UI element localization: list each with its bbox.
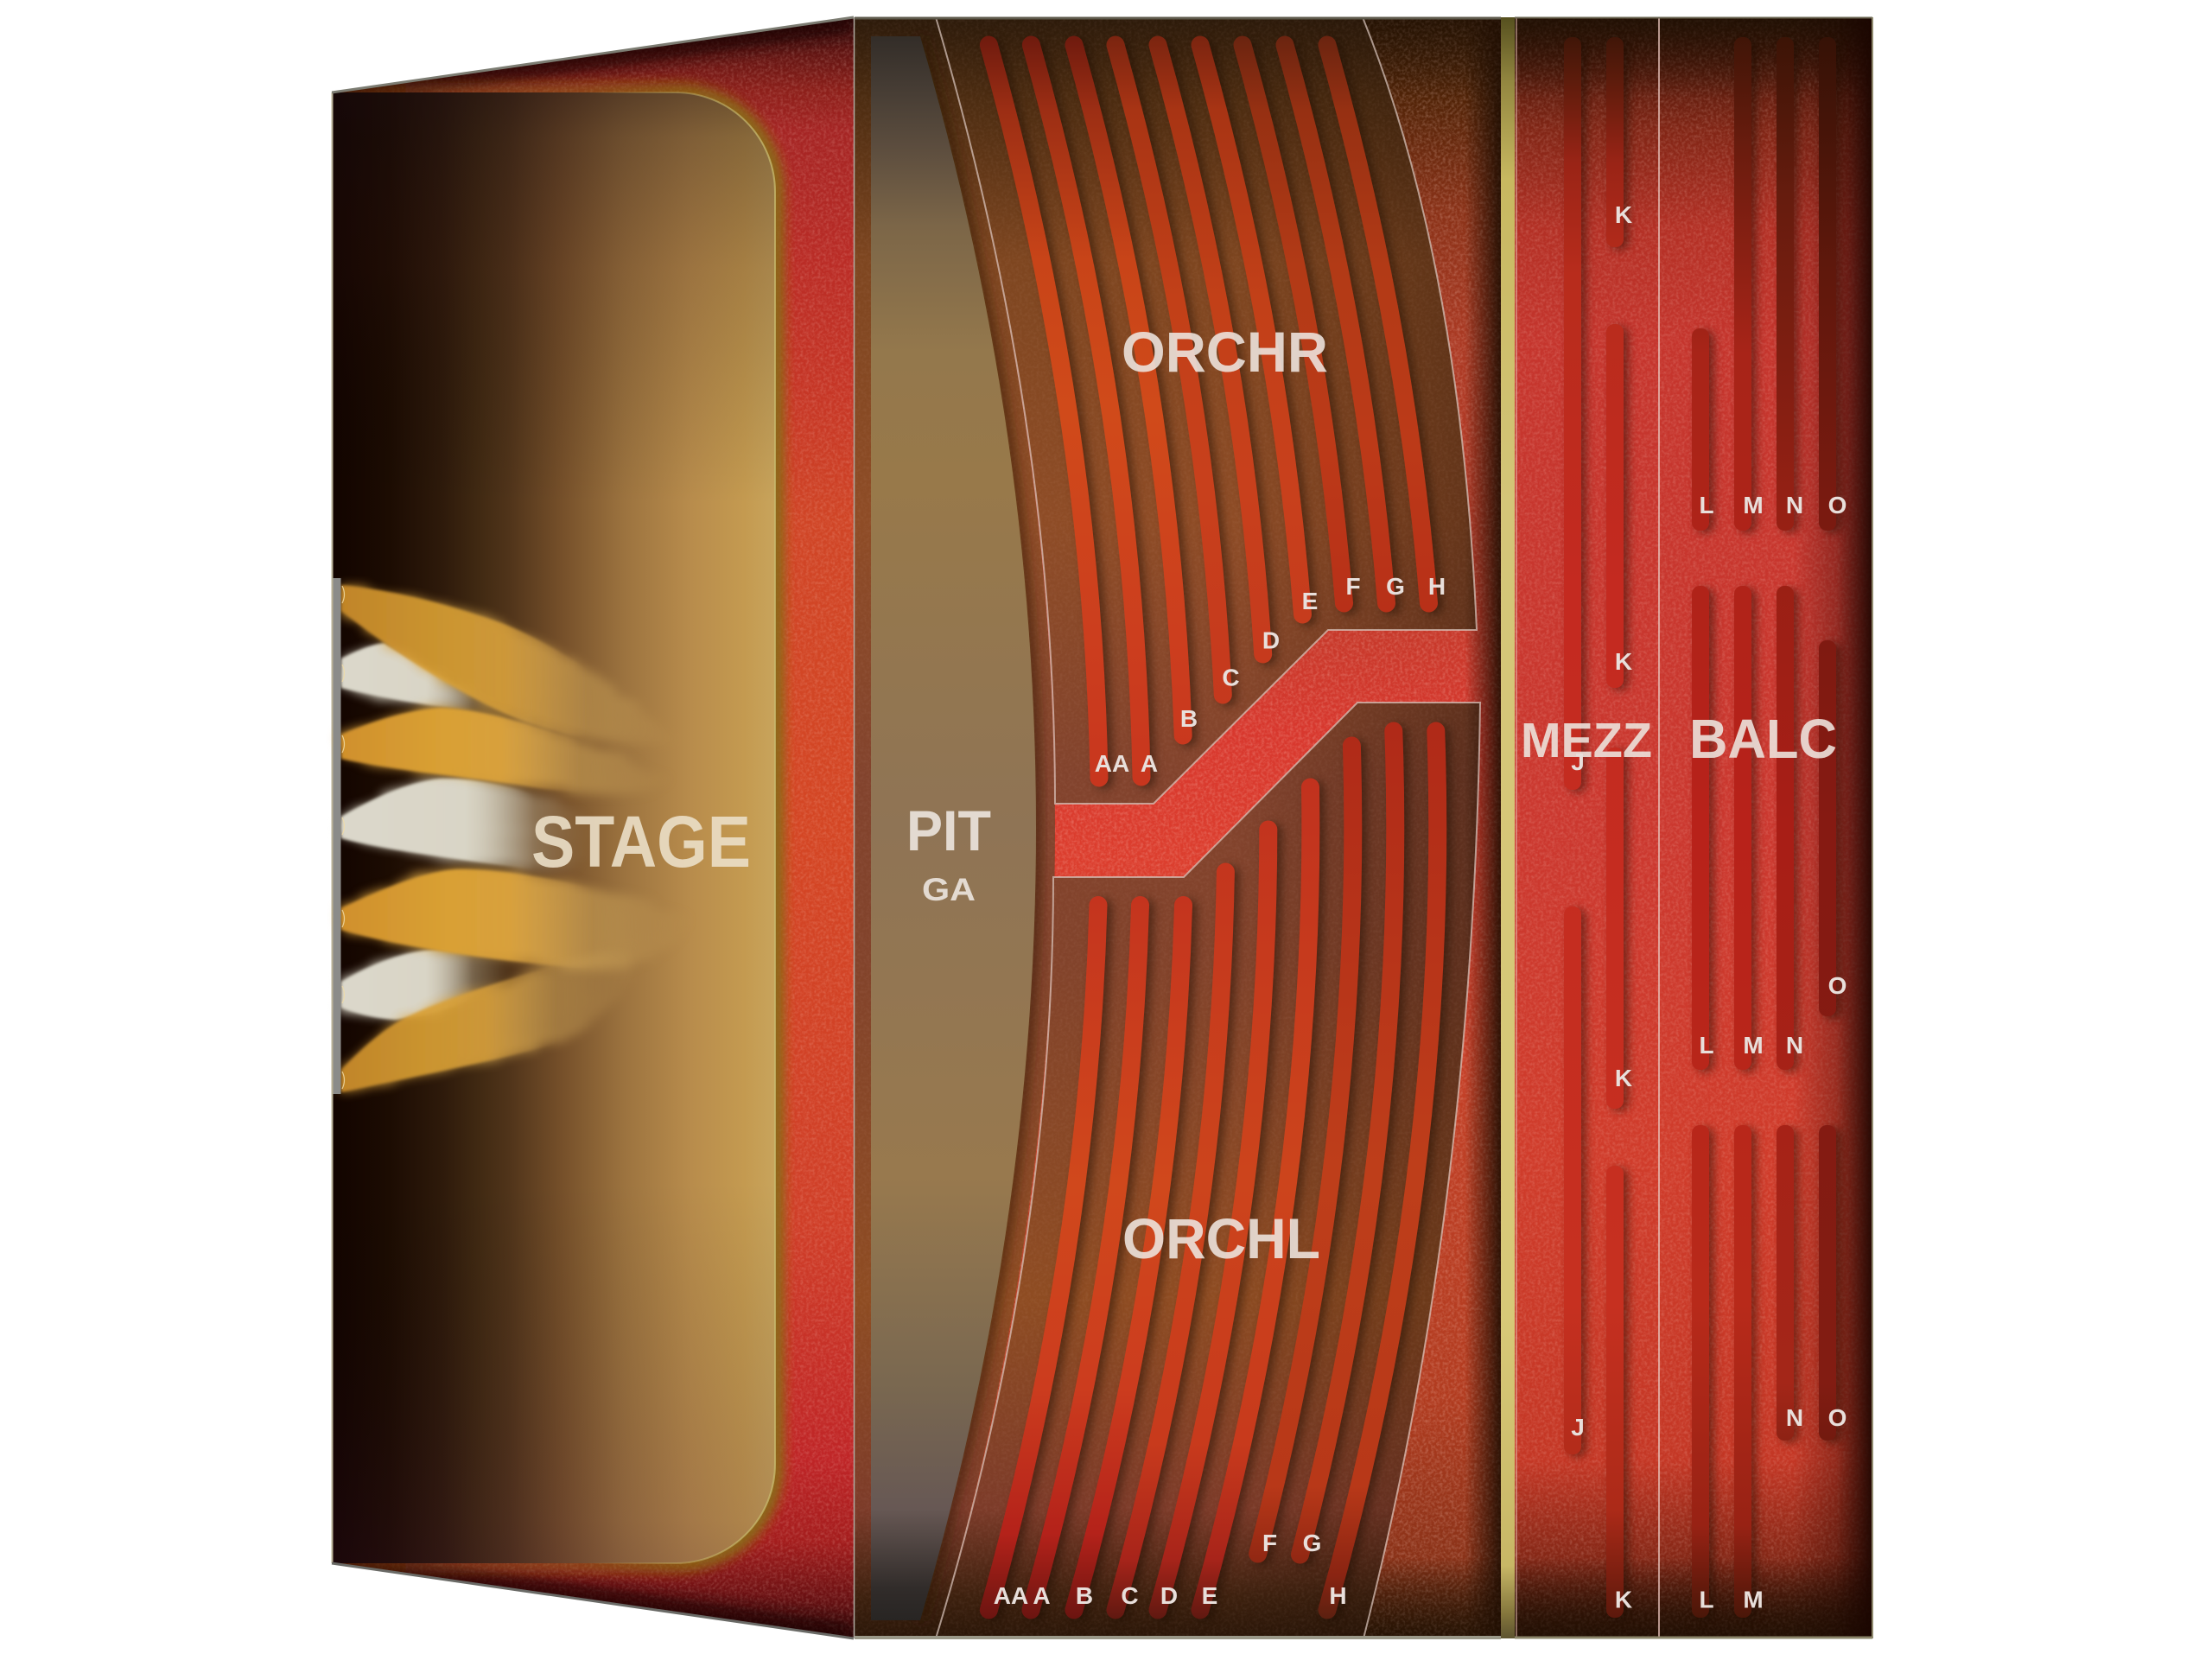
row B — [1074, 45, 1183, 735]
row J lower — [1564, 906, 1581, 1454]
amber beam 3 — [341, 869, 691, 968]
row C — [1116, 872, 1225, 1610]
row labels: ORCHR: D — [1262, 627, 1280, 653]
row D — [1158, 45, 1263, 654]
row labels: balcony: O — [1828, 492, 1847, 518]
row O upper — [1819, 37, 1836, 531]
row K segment 3 — [1606, 747, 1624, 1109]
row labels: ORCHL: F — [1262, 1530, 1277, 1556]
surface noise texture — [332, 17, 1873, 1638]
row labels: balcony: N — [1786, 1404, 1803, 1431]
white beam 2 — [341, 779, 589, 872]
row labels: ORCHL: D — [1160, 1582, 1178, 1609]
row O middle — [1819, 640, 1836, 1016]
row F — [1258, 746, 1353, 1554]
orchestra pit-side floor strip — [855, 17, 1055, 1638]
row N lower — [1777, 1125, 1794, 1441]
row M middle — [1734, 586, 1751, 1070]
row labels: mezzanine: K — [1615, 1065, 1632, 1091]
row labels: ORCHR: B — [1180, 705, 1198, 732]
row labels: mezzanine: K — [1615, 1587, 1632, 1613]
row labels: balcony: M — [1743, 492, 1764, 518]
structural frame lines — [332, 17, 1872, 1638]
shading on orchestra floors and right wall — [1281, 19, 1501, 1636]
row J upper — [1564, 37, 1581, 790]
row labels: balcony: O — [1828, 1404, 1847, 1431]
row labels: balcony: L — [1699, 492, 1714, 518]
row labels: ORCHL: B — [1076, 1582, 1093, 1609]
row labels: balcony: M — [1743, 1587, 1764, 1613]
panel: stage — [332, 92, 775, 1563]
lighting bar with lamps — [334, 578, 344, 1094]
row labels: mezzanine: K — [1615, 648, 1632, 675]
row L middle — [1692, 586, 1709, 1070]
row labels: mezzanine — [1571, 201, 1632, 1613]
row N middle — [1777, 586, 1794, 1070]
row labels: ORCHR: G — [1386, 573, 1405, 600]
gold divider band — [1501, 17, 1515, 1638]
stage light beams — [341, 585, 691, 1092]
panel: pit — [871, 36, 1036, 1620]
rows: ORCHR — [988, 45, 1429, 778]
row AA — [988, 906, 1098, 1610]
row labels: balcony — [1699, 492, 1847, 1613]
row D — [1158, 830, 1268, 1610]
row labels: mezzanine: J — [1571, 748, 1585, 775]
label: STAGE: STAGE — [531, 801, 751, 882]
row L lower — [1692, 1125, 1709, 1618]
row A — [1031, 906, 1141, 1610]
label: ORCHL: ORCHL — [1122, 1206, 1320, 1270]
top and bottom edge darkening — [855, 17, 1872, 1638]
amber beam 4 — [341, 942, 640, 1092]
row H — [1327, 45, 1429, 603]
white beam 1 — [341, 643, 510, 714]
rows: balcony — [1692, 37, 1836, 1618]
amber beam 1 — [341, 585, 683, 744]
row labels: ORCHR: A — [1141, 750, 1158, 777]
row G — [1285, 45, 1386, 603]
row A — [1031, 45, 1141, 777]
label: ORCHR: ORCHR — [1122, 320, 1328, 384]
row labels: ORCHL: E — [1202, 1582, 1217, 1609]
orchestra outlines — [936, 17, 1480, 1638]
row L upper — [1692, 328, 1709, 531]
row C — [1116, 45, 1223, 695]
row M upper — [1734, 37, 1751, 531]
row labels: ORCHL: H — [1329, 1582, 1347, 1609]
row K segment 4 — [1606, 1166, 1624, 1618]
row M lower — [1734, 1125, 1751, 1618]
row labels: ORCHR: AA — [1095, 750, 1129, 777]
panel: orchestra right floor — [936, 17, 1477, 804]
row AA — [988, 45, 1099, 778]
panel: orchestra left floor — [936, 703, 1480, 1638]
row N upper — [1777, 37, 1794, 531]
row G — [1300, 731, 1395, 1555]
rows: ORCHL — [988, 731, 1438, 1610]
row F — [1243, 45, 1344, 603]
row labels: ORCHR: F — [1345, 573, 1361, 600]
pit edge shadow — [920, 36, 1036, 1620]
row labels: ORCHL: A — [1033, 1582, 1051, 1609]
row labels: ORCHL: AA — [994, 1582, 1028, 1609]
row labels: ORCHL — [994, 1530, 1347, 1609]
label: BALC: BALC — [1689, 708, 1837, 770]
amber beam 2 — [341, 708, 674, 792]
row labels: balcony: M — [1743, 1032, 1764, 1059]
row labels: mezzanine: J — [1571, 1414, 1585, 1441]
label: PIT: PIT — [906, 798, 991, 862]
row labels: ORCHL: C — [1121, 1582, 1139, 1609]
row B — [1074, 906, 1184, 1610]
row labels: balcony: N — [1786, 492, 1803, 518]
row O lower — [1819, 1125, 1836, 1441]
row labels: balcony: O — [1828, 972, 1847, 999]
rows: mezzanine — [1564, 37, 1624, 1618]
light noise on orchestra floors — [855, 17, 1501, 1638]
row labels: mezzanine: K — [1615, 201, 1632, 228]
row labels: balcony: L — [1699, 1587, 1714, 1613]
trapezoid edge shading — [332, 17, 854, 1638]
venue base surfaces — [332, 17, 1872, 1638]
label: MEZZ: MEZZ — [1521, 713, 1652, 768]
row K segment 1 — [1606, 37, 1624, 247]
row H — [1327, 731, 1438, 1610]
row labels: balcony: N — [1786, 1032, 1803, 1059]
row labels: ORCHL: G — [1303, 1530, 1321, 1556]
row labels: ORCHR: C — [1222, 664, 1240, 691]
label: GA: GA — [922, 872, 976, 907]
row labels: ORCHR: H — [1428, 573, 1446, 600]
row K segment 2 — [1606, 324, 1624, 688]
row labels: balcony: L — [1699, 1032, 1714, 1059]
row E — [1200, 45, 1303, 614]
row labels: ORCHR — [1095, 573, 1446, 777]
balcony right vignette — [1793, 17, 1872, 1638]
section labels — [531, 320, 1837, 1270]
row E — [1200, 787, 1311, 1610]
white beam 3 — [341, 950, 510, 1020]
row labels: ORCHR: E — [1302, 588, 1318, 614]
